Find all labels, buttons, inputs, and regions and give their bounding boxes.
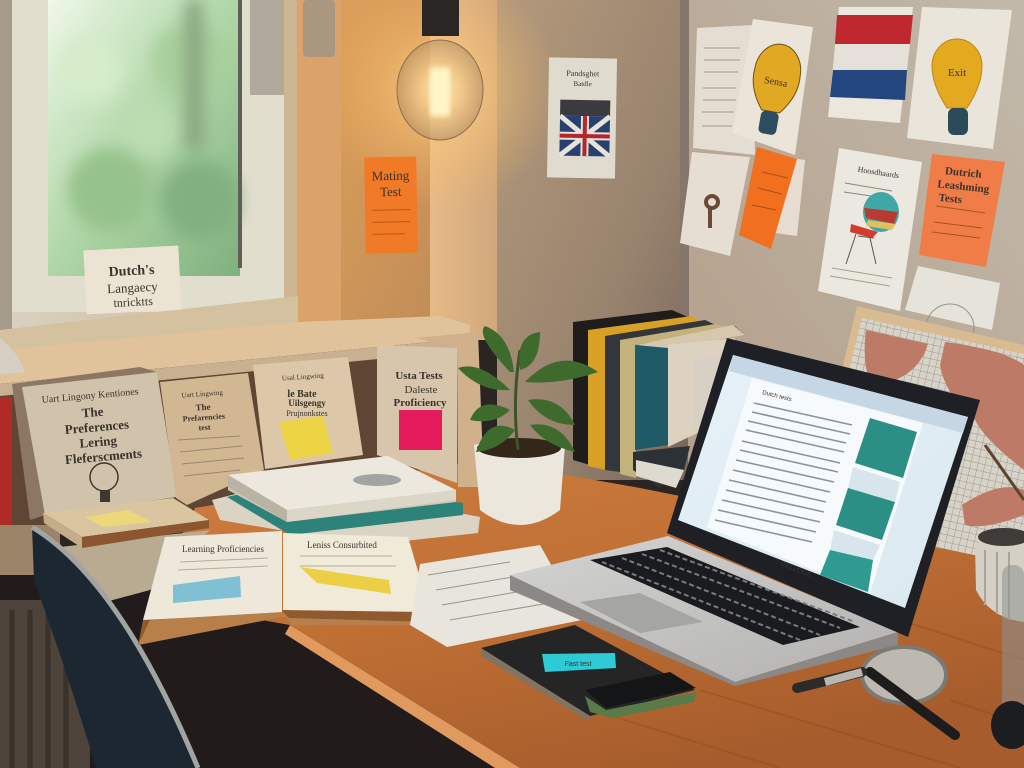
window card — [83, 246, 182, 314]
book: tan third: le Bate — [287, 389, 317, 400]
window card: Dutch's — [108, 263, 155, 280]
book: proficiency left: The — [81, 404, 104, 420]
open book: Learning Proficiencies — [182, 544, 264, 554]
window card: Langaecy — [107, 279, 159, 296]
poster: union flag — [547, 57, 617, 179]
paper: yellow bulb one: Sensa — [763, 75, 789, 90]
book: usta tests: Usta Tests — [395, 370, 443, 382]
keyboard — [590, 547, 860, 645]
laptop base — [510, 536, 898, 682]
book: usta tests: Proficiency — [394, 397, 447, 409]
book: proficiency left: Preferences — [64, 416, 130, 437]
book: tan second: test — [198, 423, 211, 432]
laptop — [510, 338, 980, 686]
book: tan second — [160, 373, 264, 505]
world map board — [843, 306, 1024, 580]
book: tan third: Usal Lingwing — [282, 372, 324, 382]
sticky note: orange strip — [739, 147, 797, 249]
window — [0, 0, 341, 350]
book: tan third — [253, 357, 363, 469]
sticky note: dutch learning tests — [919, 154, 1005, 267]
paper: dutch flag — [828, 7, 913, 123]
poster: union flag: Pandsghet — [566, 69, 600, 78]
laptop: DELLOGE — [779, 560, 813, 579]
laptop screen — [678, 355, 968, 608]
light bulb — [397, 0, 483, 140]
sticky note: dutch learning tests: Tests — [938, 192, 963, 206]
paper: yellow bulb two — [907, 7, 1012, 149]
laptop: Dutch tests — [762, 390, 792, 403]
paper: globe sketch — [905, 266, 1000, 352]
paper on desk — [410, 545, 582, 647]
book: proficiency left: Lering — [79, 433, 118, 451]
book: tan third: Uilsgengy — [288, 398, 326, 408]
windowsill — [0, 316, 470, 575]
small stack with open book — [43, 498, 210, 607]
magnifying glass and pen — [797, 647, 955, 735]
tablet and phone: Fast test — [565, 661, 591, 668]
sticky note: mating test: Test — [380, 184, 402, 199]
bookshelf books behind laptop — [573, 310, 745, 488]
open book — [138, 531, 432, 645]
vase and jar — [975, 445, 1024, 749]
paper: red chair — [818, 148, 922, 311]
book: proficiency left: Uart Lingony Kentiones — [41, 386, 139, 406]
book: tan second: Prefarencies — [182, 412, 225, 424]
paper: key drawing — [680, 152, 750, 256]
sticky note: mating test — [364, 157, 418, 253]
book: usta tests — [377, 332, 484, 487]
books on sill — [12, 332, 484, 520]
open book: Leniss Consurbited — [307, 540, 377, 550]
trackpad — [580, 593, 703, 633]
paper: yellow bulb two: Exit — [948, 67, 966, 79]
paper: notes — [693, 25, 755, 155]
laptop lid — [667, 338, 980, 637]
lower left shadow and radiator — [0, 575, 520, 768]
book: usta tests: Daleste — [405, 384, 438, 396]
paper: yellow bulb one — [732, 19, 813, 155]
poster: union flag: Batdle — [573, 80, 592, 88]
book: tan second: The — [195, 402, 211, 413]
book: proficiency left: Fleferscments — [64, 445, 143, 467]
potted plant — [458, 326, 598, 525]
book: tan third: Prujnonkstes — [286, 409, 328, 418]
window card: tnricktts — [113, 294, 153, 310]
walls — [290, 0, 1024, 480]
chair — [32, 527, 200, 768]
paper: white strip — [775, 158, 805, 236]
sticky note: yellow on book — [279, 416, 333, 460]
sticky note: dutch learning tests: Dutrich — [944, 165, 982, 181]
sticky note: dutch learning tests: Leashming — [937, 178, 990, 196]
sticky note: mating test: Mating — [372, 168, 410, 183]
paper: red chair: Hoosdhaards — [857, 165, 900, 180]
screen page — [707, 378, 923, 593]
book: tan second: Uart Lingwing — [181, 389, 224, 400]
book: proficiency left — [12, 367, 177, 520]
wall papers — [680, 7, 1012, 352]
tablet and phone — [481, 625, 696, 722]
stacked books centre — [212, 456, 480, 545]
desk — [150, 460, 1024, 768]
